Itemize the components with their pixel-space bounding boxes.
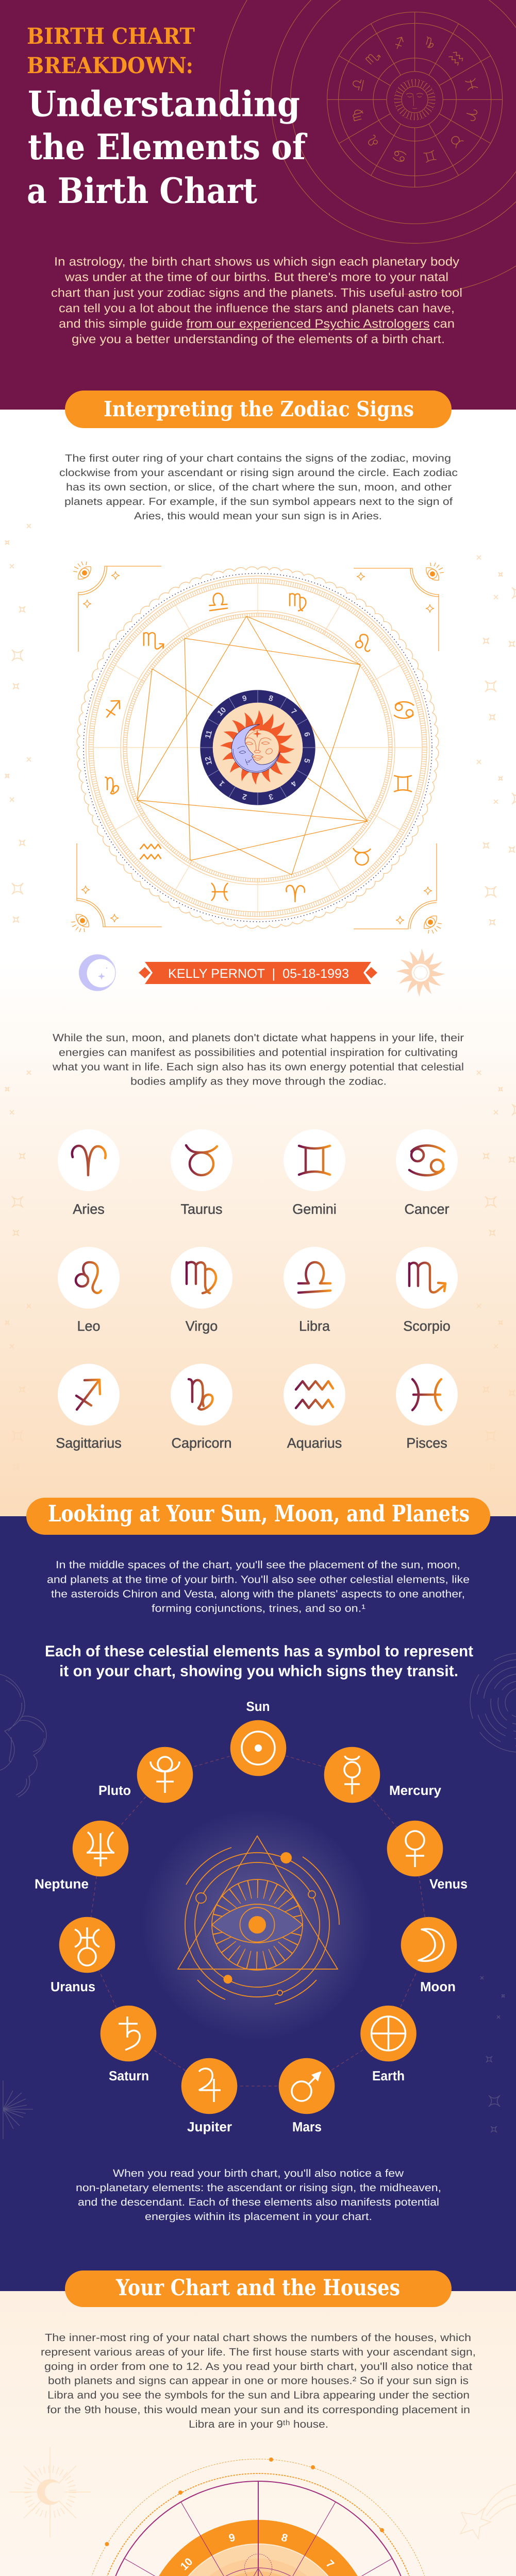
center disc with house numbers: 7	[289, 707, 298, 716]
paragraph: middle spaces: forming conjunctions, trines, and so on.¹	[152, 1603, 365, 1615]
panel: sun moon and planets	[0, 1498, 516, 2291]
planet: Neptune: Neptune	[35, 1876, 89, 1892]
panel: your chart and the houses	[0, 2270, 516, 2576]
paragraph: first outer ring: planets appear. For example, if the sun symbol appears next to the sign of	[64, 496, 453, 507]
intro text: chart than just your zodiac signs and the planets. This useful astro tool	[51, 286, 462, 299]
center disc with house numbers: 8	[268, 694, 274, 703]
paragraph: inner-most ring	[41, 2332, 476, 2430]
all-seeing eye illustration	[178, 1836, 339, 2004]
sign: Aries: Aries	[73, 1201, 105, 1217]
paragraph: inner-most ring: going in order from one to 12. As you read your birth chart, you'll also notice that	[44, 2361, 472, 2372]
planet: Pluto: Pluto	[98, 1783, 131, 1798]
bold subheading: it on your chart, showing you which signs they transit.	[59, 1663, 458, 1680]
paragraph: non-planetary elements: and the descendant. Each of these elements also manifests potential	[78, 2196, 439, 2208]
sign: Gemini	[284, 1129, 345, 1217]
zodiac icon grid	[56, 1129, 458, 1451]
section pill heading: Interpreting the Zodiac Signs	[104, 397, 414, 421]
planet: Mars: Mars	[292, 2119, 322, 2134]
section pill heading	[65, 2270, 452, 2307]
center disc with house numbers	[200, 690, 315, 805]
planet: Sun: Sun	[246, 1699, 270, 1714]
birth chart wheel	[57, 547, 459, 948]
intro text: In astrology, the birth chart shows us which sign each planetary body	[54, 255, 459, 268]
center disc with house numbers: 9	[241, 694, 248, 703]
sign: Capricorn: Capricorn	[171, 1435, 232, 1451]
sign: Sagittarius	[56, 1364, 122, 1451]
sign: Aries	[58, 1129, 120, 1217]
planet: Earth: Earth	[372, 2068, 405, 2083]
paragraph: sun moon planets: what you want in life. Each sign also has its own energy potential that celestial	[52, 1061, 464, 1073]
planet: Mercury	[324, 1747, 442, 1803]
bold subheading	[45, 1643, 473, 1680]
planet: Venus: Venus	[429, 1876, 468, 1892]
sign: Taurus: Taurus	[180, 1201, 223, 1217]
center disc with house numbers: 11	[204, 730, 214, 739]
sign: Aquarius	[284, 1364, 345, 1451]
planet connector dashes	[87, 1748, 429, 2086]
sign: Libra: Libra	[299, 1318, 330, 1334]
paragraph: inner-most ring: represent various areas of your life. The first house starts with your ascendant sign,	[41, 2346, 476, 2358]
sign: Pisces	[396, 1364, 458, 1451]
title: BREAKDOWN:	[27, 53, 193, 79]
center disc with house numbers: 4	[289, 779, 298, 788]
panel: header	[0, 0, 516, 410]
bold subheading: Each of these celestial elements has a symbol to represent	[45, 1643, 473, 1660]
section pill heading: Your Chart and the Houses	[115, 2275, 400, 2301]
paragraph: middle spaces: the asteroids Chiron and Vesta, along with the planets' aspects to one another,	[51, 1588, 465, 1600]
center disc with house numbers: 1	[217, 779, 226, 788]
planet: Uranus: Uranus	[51, 1979, 95, 1994]
planet: Neptune	[35, 1821, 128, 1892]
paragraph: inner-most ring: Libra and you see the symbols for the sun and Libra appearing under the section	[47, 2389, 470, 2401]
title: BIRTH CHART	[27, 24, 195, 49]
house numbers: 9	[228, 2532, 237, 2545]
intro text: can tell you a lot about the influence the stars and planets can have,	[59, 301, 455, 315]
title: Understanding	[28, 83, 300, 125]
paragraph: inner-most ring: The inner-most ring of your natal chart shows the numbers of the houses, which	[45, 2332, 471, 2344]
planet: Venus	[387, 1821, 468, 1892]
sign: Virgo: Virgo	[186, 1318, 218, 1334]
paragraph: non-planetary elements	[76, 2167, 441, 2223]
planet: Moon: Moon	[420, 1979, 456, 1994]
planet: Jupiter	[181, 2058, 237, 2134]
section pill heading	[26, 1498, 490, 1535]
planet: Jupiter: Jupiter	[187, 2119, 232, 2134]
paragraph: middle spaces: In the middle spaces of the chart, you'll see the placement of the sun, moon,	[56, 1559, 460, 1571]
planet: Uranus	[51, 1917, 115, 1994]
paragraph: sun moon planets: bodies amplify as they move through the zodiac.	[130, 1076, 387, 1088]
corner frames with eyes	[71, 562, 444, 934]
sign: Libra	[284, 1247, 345, 1334]
planet: Sun	[230, 1699, 286, 1776]
planet: Mars	[279, 2058, 335, 2134]
panel: interpreting the zodiac signs	[0, 391, 516, 1516]
sign: Leo	[58, 1247, 120, 1334]
paragraph: middle spaces	[47, 1559, 470, 1615]
scalloped rim	[57, 547, 459, 948]
sign: Pisces: Pisces	[406, 1435, 447, 1451]
paragraph: inner-most ring: both planets and signs can appear in one or more houses.² So if your sun sign is	[48, 2375, 469, 2387]
intro text: and this simple guide from our experienced Psychic Astrologers can	[59, 317, 455, 330]
planet: Mercury: Mercury	[389, 1783, 442, 1798]
sign: Scorpio	[396, 1247, 458, 1334]
icon: sun and moon	[220, 710, 295, 785]
paragraph: sun moon planets: While the sun, moon, and planets don't dictate what happens in your life, their	[53, 1032, 464, 1044]
paragraph: middle spaces: and planets at the time of your birth. You'll also see other celestial elements, like	[47, 1573, 470, 1586]
center disc with house numbers: 12	[203, 755, 214, 766]
intro text	[51, 255, 462, 346]
title: a Birth Chart	[27, 171, 258, 212]
paragraph: sun moon planets	[52, 1032, 464, 1088]
sacred geometry lines	[104, 2481, 413, 2576]
center disc with house numbers: 2	[241, 792, 248, 801]
paragraph: first outer ring: has its own section, or slice, of the chart where the sun, moon, and other	[66, 482, 452, 493]
title	[27, 24, 307, 212]
sign: Gemini: Gemini	[292, 1201, 337, 1217]
sign: Sagittarius: Sagittarius	[56, 1435, 122, 1451]
name ribbon	[139, 962, 377, 984]
paragraph: first outer ring: Aries, this would mean your sun sign is in Aries.	[134, 511, 382, 522]
intro text: was under at the time of our births. But there's more to your natal	[64, 270, 448, 283]
paragraph: first outer ring: The first outer ring of your chart contains the signs of the zodiac, moving	[65, 453, 451, 464]
house numbers: 8	[280, 2532, 289, 2545]
planets wheel	[35, 1699, 468, 2134]
planet: Saturn: Saturn	[109, 2068, 149, 2083]
house numbers: 10	[178, 2556, 195, 2572]
planet: Moon	[401, 1917, 457, 1994]
sign: Cancer	[396, 1129, 458, 1217]
title: the Elements of	[28, 127, 307, 168]
sign: Cancer: Cancer	[404, 1201, 450, 1217]
paragraph: non-planetary elements: When you read your birth chart, you'll also notice a few	[113, 2167, 404, 2179]
zodiac signs on wheel	[105, 592, 413, 902]
center disc with house numbers: 3	[268, 792, 274, 801]
houses chart	[81, 2458, 435, 2576]
section pill heading	[65, 391, 452, 428]
planet: Pluto	[98, 1747, 193, 1803]
planet: Earth	[360, 2006, 417, 2083]
aspect lines	[137, 616, 368, 875]
intro text: give you a better understanding of the elements of a birth chart.	[72, 332, 445, 346]
paragraph: first outer ring: clockwise from your ascendant or rising sign around the circle. Each zodiac	[59, 467, 458, 479]
center disc with house numbers: 5	[302, 757, 311, 764]
central glow	[141, 1809, 373, 2041]
icon: crescent moon	[79, 955, 115, 991]
paragraph: first outer ring	[59, 453, 458, 522]
paragraph: non-planetary elements: energies within its placement in your chart.	[145, 2211, 372, 2223]
sign: Capricorn	[171, 1364, 232, 1451]
paragraph: non-planetary elements: non-planetary elements: the ascendant or rising sign, the midheaven,	[76, 2182, 441, 2194]
sign: Taurus	[171, 1129, 232, 1217]
center disc with house numbers: 6	[302, 731, 311, 738]
center disc with house numbers: 10	[215, 705, 228, 718]
planet: Saturn	[101, 2006, 156, 2083]
sign: Virgo	[171, 1247, 232, 1334]
name ribbon: KELLY PERNOT | 05-18-1993	[168, 967, 349, 981]
header wheel decoration	[220, 0, 516, 294]
paragraph: sun moon planets: energies can manifest as possibilities and potential inspiration for cultivating	[59, 1047, 458, 1058]
paragraph: inner-most ring: Libra are in your 9ᵗʰ house.	[189, 2418, 328, 2430]
house numbers: 7	[324, 2558, 336, 2570]
sign: Aquarius: Aquarius	[287, 1435, 342, 1451]
sign: Scorpio: Scorpio	[403, 1318, 451, 1334]
chart rings and spokes	[84, 573, 432, 922]
house numbers	[153, 2532, 362, 2576]
paragraph: inner-most ring: for the 9th house, this would mean your sun and its corresponding placement in	[47, 2404, 470, 2416]
icon: sun	[396, 948, 445, 997]
sign: Leo: Leo	[77, 1318, 101, 1334]
